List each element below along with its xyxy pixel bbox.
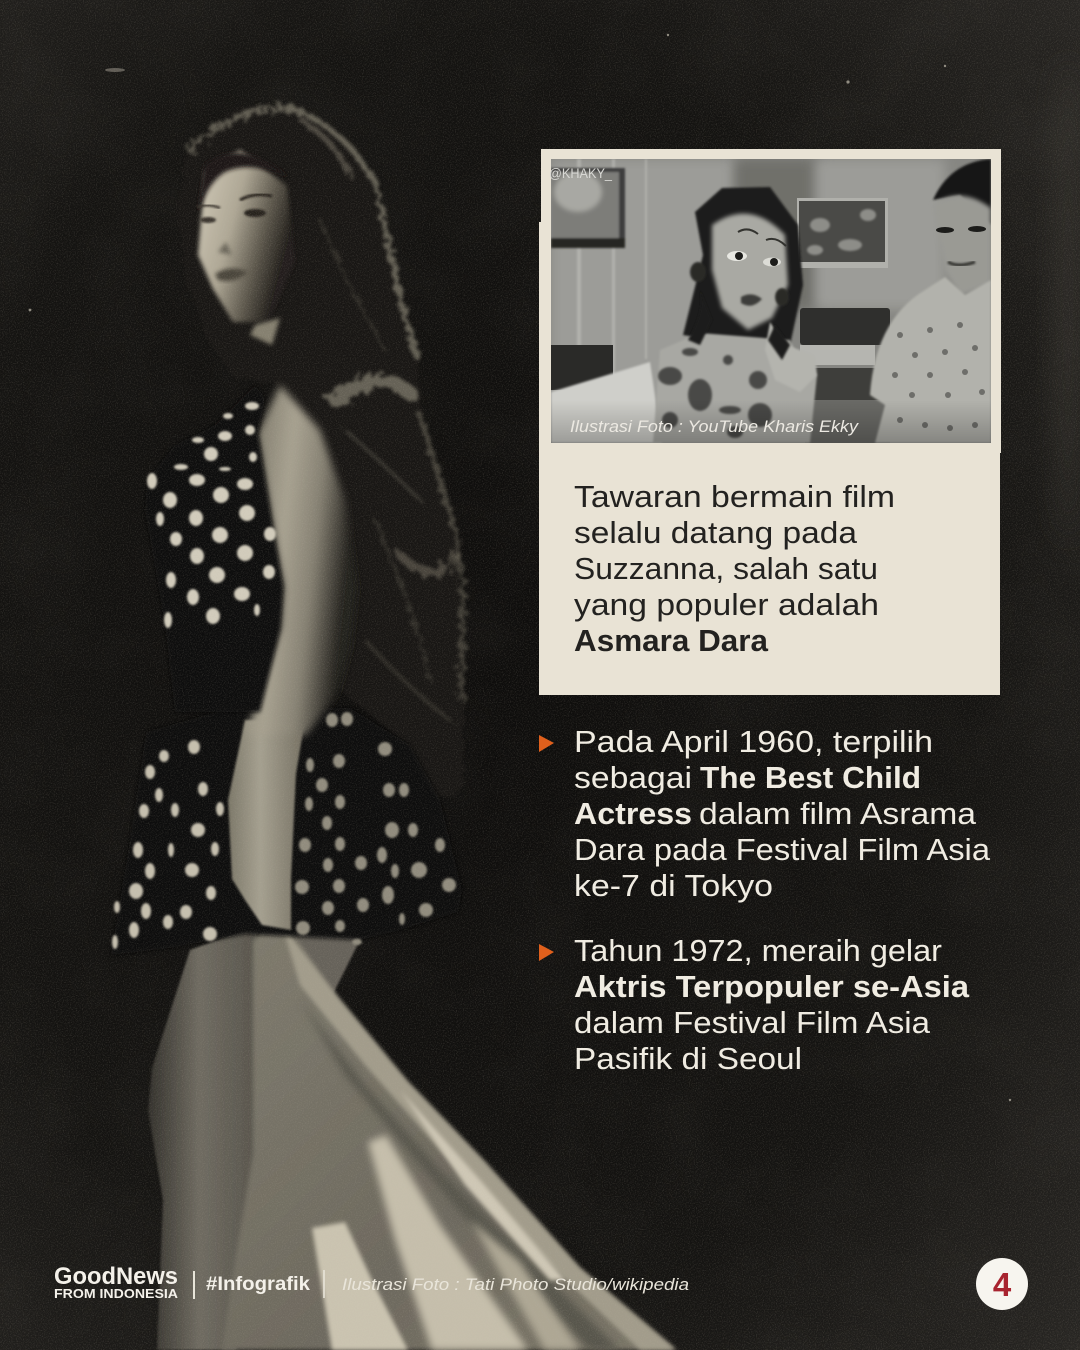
face (197, 150, 295, 345)
photo: woman in polka dot dress with long hair (111, 105, 676, 1350)
hair (177, 105, 464, 800)
bullet text (574, 933, 970, 1076)
bullet text (574, 724, 991, 903)
caption shade (551, 407, 991, 443)
bullet text: The Best Child (700, 760, 921, 795)
sofa and table (800, 308, 890, 345)
card text (574, 479, 895, 658)
bullet point: 1972 award (539, 933, 970, 1076)
bullet text: sebagai (574, 760, 692, 795)
card text: yang populer adalah (574, 587, 879, 622)
bullet text: Pada April 1960, terpilih (574, 724, 933, 759)
woman on right (933, 159, 991, 225)
left wall picture (551, 168, 625, 248)
inset photo caption: Ilustrasi Foto : YouTube Kharis Ekky (570, 417, 860, 436)
bullet text: dalam film Asrama (699, 796, 977, 831)
logo: GoodNews from Indonesia: FROM INDONESIA (54, 1287, 178, 1301)
far leg shadow (290, 930, 362, 1000)
white table (551, 362, 662, 443)
bullet text: dalam Festival Film Asia (574, 1005, 931, 1040)
card background (539, 149, 1001, 695)
logo: GoodNews from Indonesia: GoodNews (54, 1263, 178, 1290)
card text: Asmara Dara (574, 623, 769, 658)
hair strands and rim light (190, 108, 463, 720)
girl (683, 187, 803, 345)
bullet text: Aktris Terpopuler se-Asia (574, 969, 970, 1004)
bullet text: Actress (574, 796, 692, 831)
skirt (111, 708, 462, 955)
watermark handle: @KHAKY_ (549, 166, 612, 181)
footer (54, 1258, 1028, 1310)
dress bodice (145, 385, 283, 712)
icon: orange triangle bullet (539, 735, 554, 752)
card text: selalu datang pada (574, 515, 858, 550)
inset photo: film still from Asmara Dara (551, 159, 991, 443)
photo credit: Ilustrasi Foto : Tati Photo Studio/wikipedia (342, 1275, 689, 1294)
bullet point: 1960 award (539, 724, 991, 903)
page number badge: 4 (993, 1266, 1012, 1303)
right wall picture (797, 198, 888, 268)
bullet text: ke-7 di Tokyo (574, 868, 773, 903)
white cloth (222, 915, 676, 1350)
page number badge (976, 1258, 1028, 1310)
icon: orange triangle bullet (539, 944, 554, 961)
hashtag: #Infografik (206, 1274, 310, 1295)
bullet text: Dara pada Festival Film Asia (574, 832, 991, 867)
panel: film card (539, 149, 1001, 695)
card text: Suzzanna, salah satu (574, 551, 878, 586)
bullet text: Tahun 1972, meraih gelar (574, 933, 942, 968)
arm (228, 385, 357, 930)
bullet text: Pasifik di Seoul (574, 1041, 802, 1076)
card text: Tawaran bermain film (574, 479, 895, 514)
near leg (148, 925, 262, 1350)
